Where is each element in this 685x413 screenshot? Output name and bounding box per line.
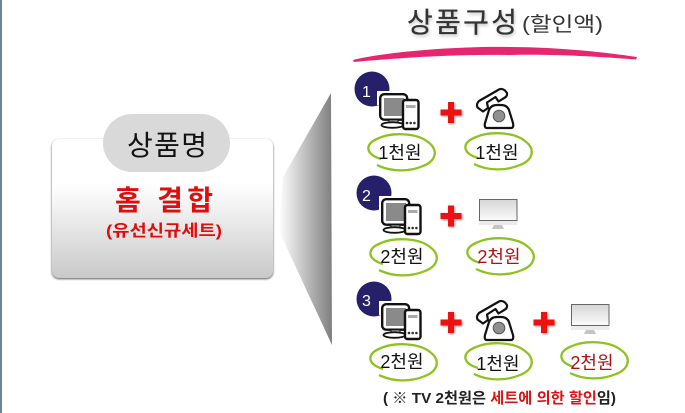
price: phone: 1천원 xyxy=(476,354,520,374)
title: (할인액) xyxy=(522,13,603,36)
row 2: internet + TV xyxy=(356,176,534,275)
product name pill xyxy=(103,114,230,172)
row 3: internet + phone + TV xyxy=(356,282,628,380)
price: internet xyxy=(370,239,437,275)
plus xyxy=(534,312,554,333)
price: internet: 2천원 xyxy=(380,352,424,372)
badge 3: 3 xyxy=(362,293,371,310)
plus xyxy=(440,312,462,333)
price: TV: 2천원 xyxy=(477,247,521,267)
row 1: internet + phone xyxy=(354,72,532,170)
pink brush underline xyxy=(353,47,637,62)
price: TV: 2천원 xyxy=(570,353,614,373)
price: TV xyxy=(561,342,628,378)
badge 1: 1 xyxy=(362,84,371,101)
left product panel xyxy=(52,114,273,278)
price: phone xyxy=(465,343,532,379)
product name pill: 상품명 xyxy=(127,130,207,161)
title: 상품구성 xyxy=(407,7,517,38)
price: internet xyxy=(370,344,437,380)
price: internet: 1천원 xyxy=(378,143,422,163)
price: internet: 2천원 xyxy=(380,247,424,267)
footnote: ( ※ TV 2천원은 세트에 의한 할인임) xyxy=(383,390,616,407)
price: TV xyxy=(467,238,534,274)
icon: computer xyxy=(379,196,423,236)
product subtitle: (유선신규세트) xyxy=(106,222,222,240)
badge 1 xyxy=(354,72,390,106)
price: internet xyxy=(368,134,435,170)
icon: computer xyxy=(377,91,421,131)
badge 2: 2 xyxy=(362,188,371,205)
left edge line xyxy=(0,0,2,413)
title: 상품구성 xyxy=(408,9,518,40)
badge 2 xyxy=(356,176,392,210)
price: phone xyxy=(465,133,532,169)
icon: TV xyxy=(479,200,518,229)
title xyxy=(407,7,603,40)
icon: phone xyxy=(477,301,513,340)
product box xyxy=(52,139,273,278)
icon: TV xyxy=(571,304,610,334)
badge 3 xyxy=(356,282,392,316)
funnel connector xyxy=(279,93,332,345)
product title: 홈 결합 xyxy=(115,185,213,216)
icon: phone xyxy=(477,89,513,128)
icon: computer xyxy=(379,301,423,341)
price: phone: 1천원 xyxy=(475,143,519,163)
plus xyxy=(440,206,462,226)
plus xyxy=(440,102,462,123)
